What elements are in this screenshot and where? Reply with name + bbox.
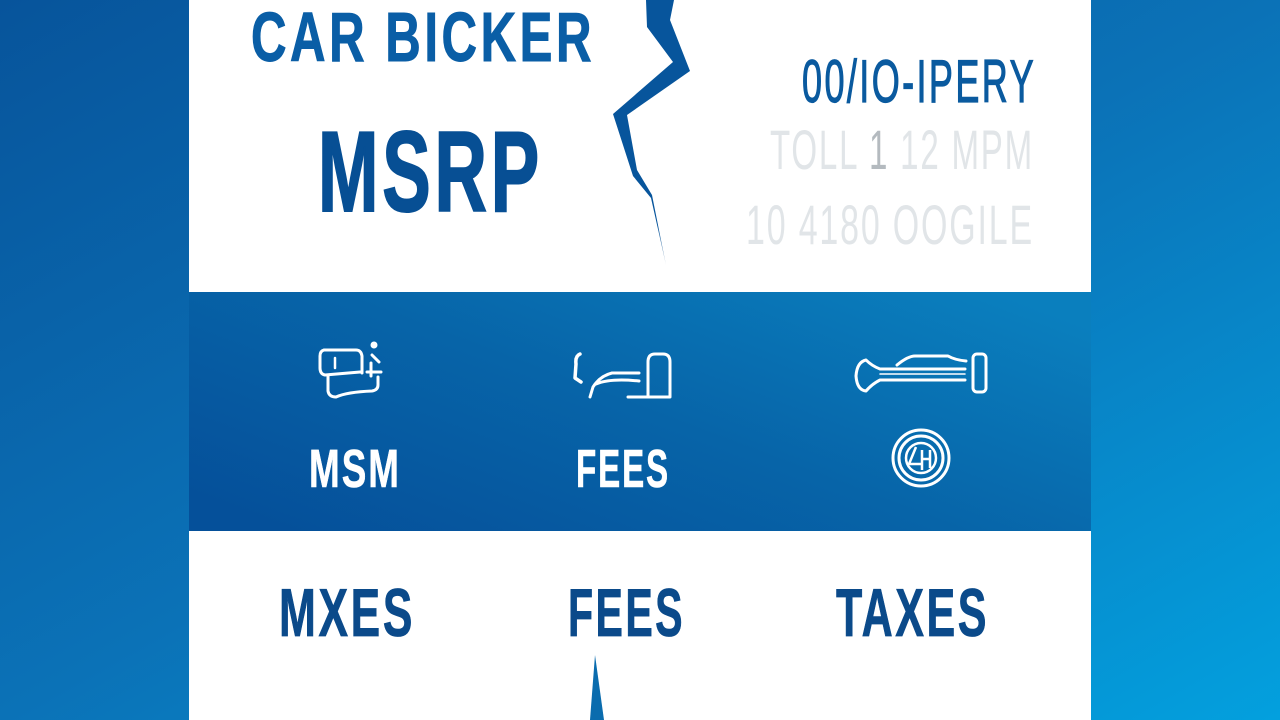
text: date line: 00/IO-IPERY <box>802 48 1036 115</box>
panel: bottom categories <box>189 531 1091 720</box>
icon: tool <box>856 354 986 392</box>
label: taxes: TAXES <box>836 575 989 651</box>
label: fees: FEES <box>568 575 685 651</box>
icon: MSM <box>320 343 381 397</box>
text: faded line two: 10 4180 OOGILE <box>746 193 1034 256</box>
crack spike <box>590 655 604 720</box>
text: faded line one: TOLL 1 12 MPM <box>770 118 1034 181</box>
heading: MSRP: MSRP <box>318 109 543 236</box>
label: mxes: MXES <box>279 575 415 651</box>
icon: round seal <box>893 430 949 486</box>
icon: fees <box>575 354 670 397</box>
label: fees: FEES <box>576 439 670 499</box>
crack graphic <box>613 0 690 265</box>
panel: top header <box>189 0 1091 292</box>
label: MSM: MSM <box>309 439 401 499</box>
heading: car bicker: CAR BICKER <box>251 0 595 76</box>
panel: blue icon band <box>189 292 1091 531</box>
